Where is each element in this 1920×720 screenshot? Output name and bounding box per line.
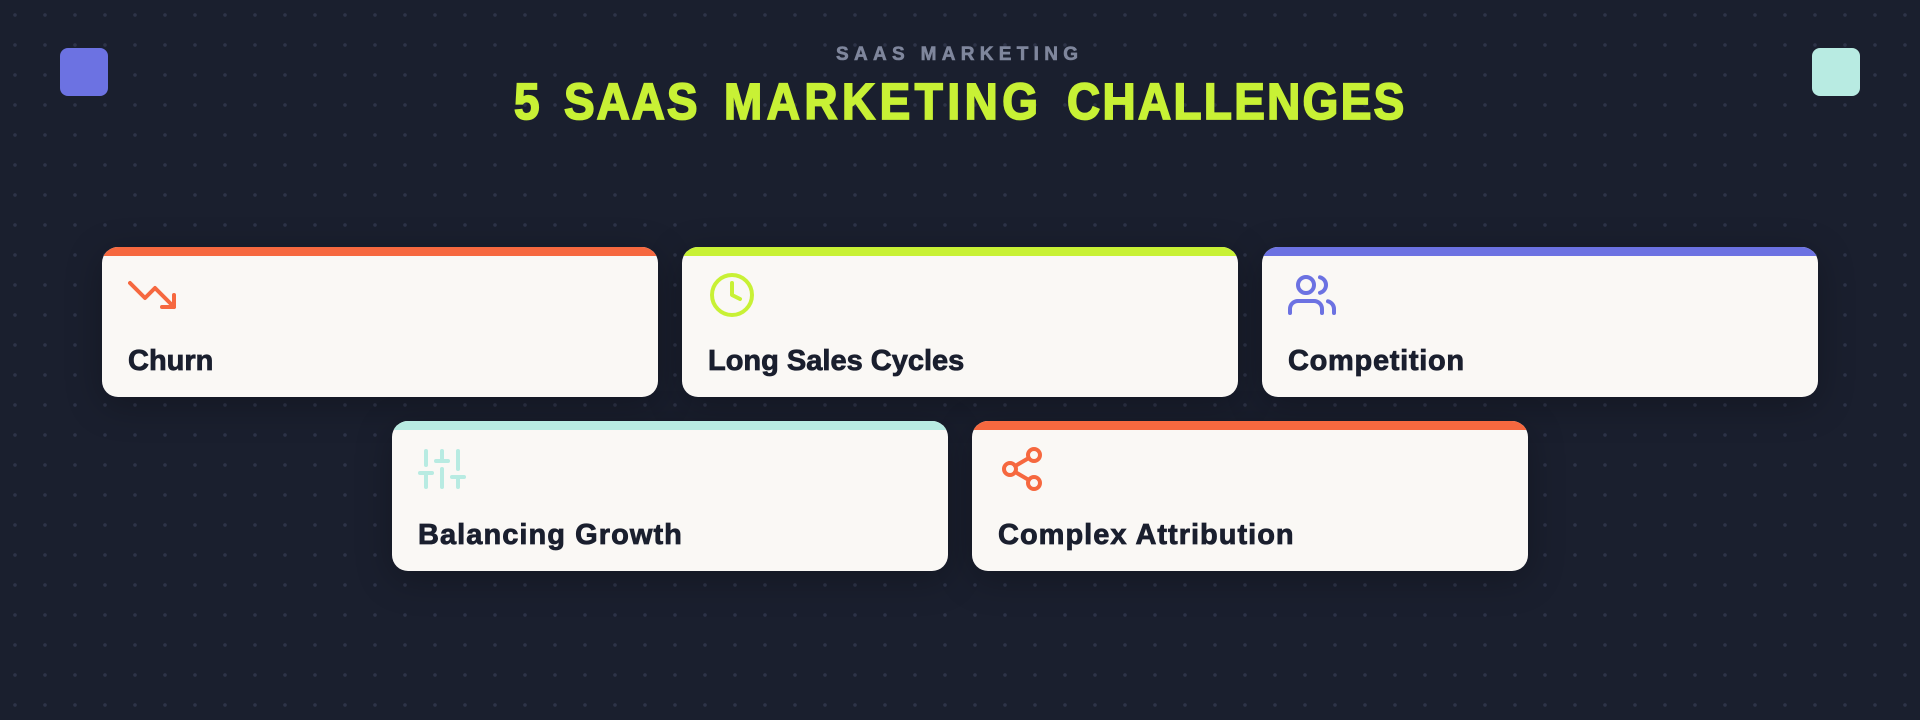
title: SAAS [564,73,699,130]
panel: long sales cycles [682,247,1238,397]
decorative square: mint [1812,48,1860,96]
card label: long sales cycles: Long Sales Cycles [708,345,964,377]
panel: complex attribution [972,421,1528,571]
card label: competition: Competition [1288,345,1465,377]
panel: balancing growth [392,421,948,571]
panel: competition [1262,247,1818,397]
icon: share nodes [1002,447,1042,491]
icon: trending down [128,280,176,310]
icon: sliders [418,449,466,489]
card label: balancing growth: Balancing Growth [418,519,683,551]
title: MARKETING [724,73,1042,130]
icon: users [1288,275,1336,315]
card label: complex attribution: Complex Attribution [998,519,1295,551]
title [514,73,1407,130]
decorative square: purple [60,48,108,96]
panel: churn [102,247,658,397]
card label: churn: Churn [128,345,213,377]
icon: clock [710,273,754,317]
eyebrow heading: SAAS MARKETING [836,44,1083,65]
title: CHALLENGES [1067,73,1407,130]
title: 5 [514,73,540,130]
